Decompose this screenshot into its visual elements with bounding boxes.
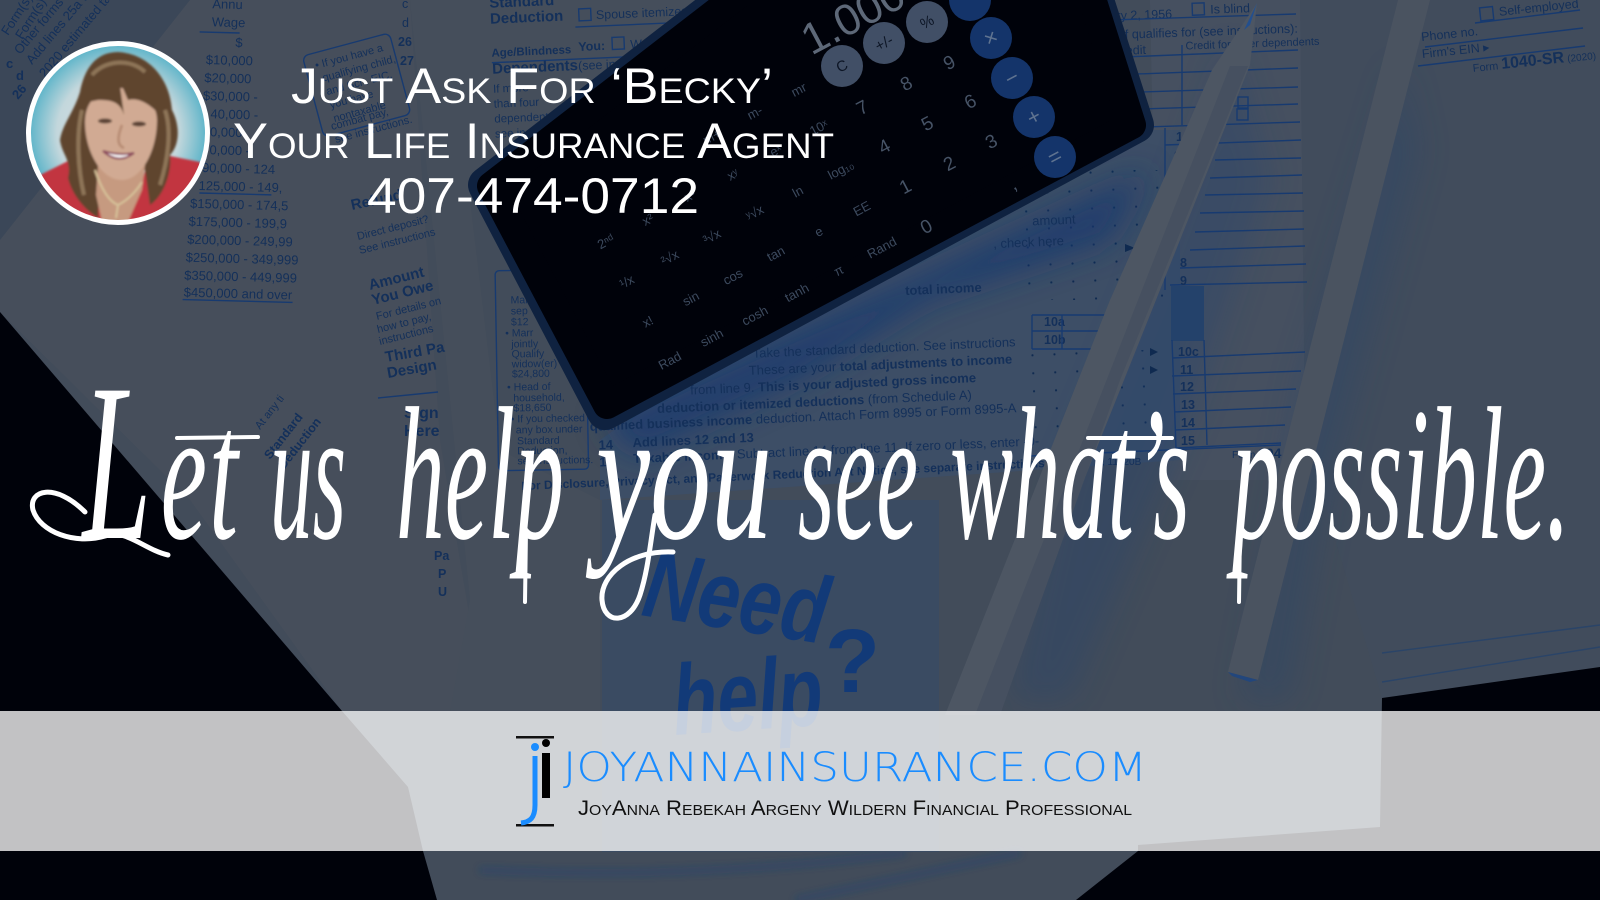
tax form: middle column: Amount: [367, 264, 426, 294]
tax form: income lines: from line 9. This is your adjusted gross income: [690, 370, 976, 397]
tax form: middle column: how to pay,: [376, 311, 433, 336]
calculator scientific keys: cosh: [739, 302, 770, 329]
tax form: right column of lines: 10a: [1044, 315, 1066, 329]
portrait: hair: [60, 52, 178, 218]
script headline: you: [586, 370, 772, 580]
tax form: middle column: and Sch. EIC,: [325, 69, 394, 98]
calculator scientific keys: cos: [720, 265, 746, 288]
tax form: standard deduction box: Deduction,: [517, 445, 568, 457]
calculator scientific keys: ¹/x: [617, 271, 637, 292]
calculator buttons: %: [917, 12, 937, 33]
tax form: income table: $150,000 - 174,5: [190, 196, 289, 213]
tax form: income lines: amount: [1032, 212, 1076, 228]
calculator phone: [486, 0, 1136, 412]
calculator scientific keys: eˣ: [767, 141, 785, 160]
tax form: middle column: you have: [329, 88, 375, 111]
script headline: t: [209, 369, 240, 580]
tax form: standard deduction box: • Marr: [505, 327, 534, 340]
tax form: standard deduction box: • Head of: [507, 381, 551, 394]
tax form: standard deduction box: sep: [511, 305, 528, 317]
tax form: middle column: qualifying child,: [321, 53, 397, 84]
tax form: main form upper part: Dependents: [492, 57, 578, 78]
script headline: what’s: [950, 370, 1190, 580]
tax form: top-right corner: Form 1040-SR (2020): [1472, 46, 1597, 76]
tax form: middle column: U: [438, 585, 447, 599]
tax form: middle column: See instructions: [358, 226, 437, 257]
tax form: standard deduction box: $24,800: [512, 368, 550, 380]
tax form: middle column: see instructions.: [334, 114, 414, 146]
agent tagline: JoyAnna Rebekah Argeny Wildern Financial Professional: [578, 797, 1132, 820]
tax form: income lines: , check here: [993, 233, 1064, 251]
tax form: middle column: Deduction: [275, 415, 324, 472]
tax form: middle column: Here: [404, 423, 440, 440]
calculator digit keys: 3: [982, 131, 1001, 154]
tax form: right column of lines: Credit for other dependents: [1185, 36, 1320, 53]
script headline: e: [161, 369, 207, 580]
phone number: 407-474-0712: [367, 168, 699, 224]
tax form: income table: $450,000 and over: [184, 285, 293, 302]
tax form: upper left rotated text: d: [16, 68, 24, 83]
tax form: main form upper part: Were born bef: [630, 34, 710, 52]
calculator buttons: +: [1022, 103, 1045, 131]
tax form: income table: 0,000 -: [209, 142, 250, 158]
script headline: us: [270, 370, 346, 580]
tax form: standard deduction box: see instructions.: [517, 454, 593, 467]
tax form: right column of lines: 13: [1181, 398, 1195, 412]
calculator scientific keys: log₁₀: [825, 157, 856, 183]
tax form: main form upper part: than four: [493, 97, 540, 111]
script headline: L: [80, 338, 151, 588]
calculator digit keys: 2: [940, 153, 959, 176]
tax form: income table: $250,000 - 349,999: [186, 250, 299, 268]
script headline: help: [396, 370, 564, 580]
calculator digit keys: 6: [961, 91, 980, 114]
tax form: right column of lines: 14: [1181, 416, 1195, 430]
heading line 1: Just Ask For ‘Becky’: [291, 58, 773, 114]
tax form: right column of lines: 11: [1180, 363, 1193, 377]
calculator digit keys: 5: [918, 113, 937, 136]
calculator buttons: =: [1043, 143, 1066, 171]
tax form: middle column: Refund: [349, 187, 403, 214]
sticky note: need help: [641, 554, 913, 852]
tax form: main form upper part: Spouse itemizes on a separate: [596, 1, 768, 22]
tax form: income table: $10,000: [206, 52, 253, 68]
calculator buttons: −: [1000, 64, 1023, 92]
tax form: right column of lines: 2: [1174, 149, 1181, 163]
tax form: standard deduction box: Married filing: [511, 293, 571, 306]
tax form: middle column: Pa: [434, 549, 450, 563]
tax form: income table: $30,000 -: [203, 88, 258, 104]
tax form: upper left rotated text: 26: [9, 81, 30, 102]
tax form: main form upper part: First n: [606, 77, 637, 91]
tax form: income lines: qualified business income deduction. Attach Form 8995 or Form 8995-A: [589, 400, 1017, 434]
tax form: right column of lines: 1: [1176, 130, 1183, 144]
phone glow shadow: [600, 170, 1150, 455]
calculator buttons: [821, 0, 1076, 178]
tax form: right column of lines: 12: [1180, 380, 1194, 394]
tax form: income table: $: [235, 35, 244, 50]
calculator scientific keys: mr: [789, 79, 810, 100]
tax form: middle column: Direct deposit?: [356, 214, 430, 243]
tax form: middle column: Sign: [404, 405, 439, 422]
sticky note: need help: help: [669, 635, 826, 757]
tax form: standard deduction box: [495, 269, 593, 471]
tax form: income lines: [510, 212, 1087, 493]
agent heading: [233, 58, 834, 224]
tax form: standard deduction box: Qualify: [511, 348, 545, 360]
tax form: standard deduction box: jointly: [510, 338, 539, 351]
tax form: income lines: 14: [598, 437, 614, 453]
calculator digit keys: 4: [875, 135, 895, 159]
black desk lower right: [1076, 667, 1600, 900]
calculator digit keys: 1: [896, 176, 915, 199]
tax form: middle column: Third Pa: [384, 339, 446, 366]
tax form: income lines: Take the standard deduction. See instructions: [752, 334, 1016, 361]
tax form: income table: 90,000 - 124: [202, 160, 275, 177]
sticky note: need help: Need: [637, 531, 838, 665]
heading line 2: Your Life Insurance Agent: [233, 113, 834, 169]
tax form: main form upper part: If more: [493, 82, 529, 96]
tax form: middle column: [253, 0, 450, 599]
tax form: right column of lines: 9: [1180, 274, 1187, 288]
portrait: jacket: [41, 154, 200, 220]
tax form: income table: $200,000 - 249,99: [187, 232, 293, 249]
tax form: main form upper part: [489, 0, 773, 141]
tax form: main form upper part: Deduction: [490, 8, 564, 28]
calculator scientific keys: EE: [851, 198, 873, 219]
tax form: middle column: 27: [400, 54, 414, 68]
tax form: main form upper part: dependents,: [494, 111, 558, 126]
tax form: right column of lines: x credit: [1105, 43, 1147, 58]
tax form: standard deduction box: widow(er): [511, 358, 557, 371]
tax form: right column of lines: 8: [1180, 256, 1187, 270]
calculator scientific keys: Rand: [865, 234, 899, 261]
calculator scientific keys: Rad: [656, 348, 684, 373]
tax form: main form upper part: Age/Blindness: [491, 44, 572, 60]
tax form: main form upper part: You:: [578, 39, 605, 54]
calculator scientific keys: 10ˣ: [807, 116, 831, 139]
tax form: income lines: 15: [599, 454, 614, 470]
tax form: middle column: P: [438, 567, 446, 581]
tax form: main form upper part: (see instructions): [578, 55, 674, 73]
calculator scientific keys: ³√x: [700, 225, 724, 247]
calculator digit keys: 8: [897, 73, 916, 96]
tax form: upper left rotated text: [0, 0, 134, 102]
tax form: right column of lines: 10b: [1044, 333, 1066, 347]
tax form: income lines: These are your total adjustments to income: [748, 351, 1013, 378]
calculator scientific keys: x!: [640, 313, 656, 331]
tax form: middle column: Design: [386, 357, 438, 382]
agent portrait: [28, 44, 215, 240]
tax form: middle column: For details on: [375, 295, 442, 323]
calculator digit keys: ,: [1006, 174, 1021, 195]
portrait: neck and chest: [96, 165, 145, 222]
calculator scientific keys: sinh: [698, 325, 726, 350]
tax form: main form upper part: see instr: [495, 127, 539, 141]
pencil 1: [945, 3, 1257, 715]
calculator scientific keys: tan: [764, 243, 787, 264]
calculator scientific keys: ²√x: [658, 246, 682, 268]
tax form: middle column: d: [402, 16, 409, 30]
calculator digit keys: 0: [917, 216, 936, 239]
tax form: income table: $350,000 - 449,999: [184, 268, 297, 286]
tax form: income lines: Taxable income. Subtract line 14 from line 11. If zero or less, enter -0-: [633, 433, 1039, 466]
tax form: right column of lines: January 2, 1956: [1082, 7, 1172, 24]
calculator scientific keys: ln: [790, 183, 806, 201]
tax form: middle column: nontaxable: [332, 99, 387, 125]
calculator digit keys: 7: [853, 97, 872, 120]
script headline: [32, 338, 1570, 618]
tax form: standard deduction box: any box under: [516, 423, 583, 436]
tax form: income table: 0,000: [210, 124, 243, 140]
tax form: income lines: For Disclosure, Privacy Act, and Paperwork Reduction Act Notice, see separate instructions.: [521, 456, 1048, 493]
tax form: income lines: total income: [905, 280, 982, 298]
calculator digit keys: 9: [940, 52, 959, 75]
tax form: main form upper part: (1): [588, 79, 602, 92]
tax form: standard deduction box: • If you checked: [511, 412, 585, 426]
calculator scientific keys: x³: [681, 186, 699, 205]
blue streaks under band: [480, 853, 1020, 900]
tax form: right column of lines: Is blind: [1210, 1, 1250, 17]
website address: JOYANNAINSURANCE.COM: [563, 745, 1147, 791]
tax form: right column of lines: [1030, 0, 1320, 468]
tax form: middle column: You Owe: [370, 277, 435, 309]
tax form: income table: [183, 0, 305, 303]
tax form: standard deduction box: household,: [513, 392, 565, 404]
tax form: upper left rotated text: c: [6, 56, 13, 71]
tax form: standard deduction box: Standard: [517, 435, 560, 447]
tax form: middle column: • If you have a: [314, 42, 385, 72]
calculator scientific keys: π: [831, 262, 846, 279]
tax form: middle column: instructions: [378, 323, 435, 348]
tax form: right column of lines: Form 104: [1232, 445, 1282, 461]
sticky note: need help: ?: [825, 612, 880, 712]
tax form: standard deduction box: $18,650: [513, 402, 552, 414]
tax form: middle column: combat pay,: [330, 106, 390, 133]
calculator scientific keys: e: [812, 223, 825, 240]
tax form: top-right corner: [1418, 0, 1597, 81]
tax form: middle column: Standard: [261, 411, 306, 462]
tax form: right column of lines: if qualifies for (see instructions):: [1122, 22, 1298, 42]
tax form: income table: $20,000: [204, 70, 252, 86]
tax form: middle column: 26: [398, 35, 412, 49]
website band: [0, 711, 1600, 851]
tax form: income table: 125,000 - 149,: [198, 178, 283, 195]
tax form: top-right corner: Firm's EIN ▸: [1421, 40, 1491, 61]
portrait: face: [85, 88, 157, 180]
calculator scientific keys: x²: [639, 210, 657, 229]
tax form: income lines: deduction or itemized deductions (from Schedule A): [657, 387, 972, 416]
tax form: income table: 40,000 -: [210, 106, 258, 123]
lower paper lines: [1382, 625, 1600, 682]
calculator scientific keys: tanh: [782, 280, 811, 305]
calculator scientific keys: ʸ√x: [742, 202, 767, 224]
tax form: income table: Wage: [212, 14, 246, 30]
tax form: income table: $175,000 - 199,9: [188, 214, 287, 231]
tax form: top-right corner: Phone no.: [1420, 24, 1479, 44]
script headline: see: [798, 370, 918, 580]
tax form: middle column: At any ti: [253, 393, 287, 432]
calculator scientific keys: xʸ: [725, 165, 742, 184]
calculator scientific keys: m-: [745, 102, 765, 123]
tax form: right column of lines: 15: [1181, 434, 1195, 448]
calculator buttons: C: [833, 56, 851, 76]
tax form: right column of lines: 10c: [1178, 345, 1199, 359]
black desk diagonal: [0, 312, 437, 900]
calculator scientific keys: m+: [700, 126, 723, 148]
ji logo: [516, 736, 554, 826]
tax form: standard deduction box: $12: [511, 316, 529, 328]
calculator scientific keys: [595, 79, 899, 373]
calculator buttons: +/-: [872, 32, 896, 55]
calculator buttons: ×: [979, 24, 1002, 52]
tax form: right column of lines: , 11320B: [1102, 457, 1142, 468]
tax form: income lines: Add lines 12 and 13: [632, 430, 754, 450]
portrait: necklace: [95, 170, 142, 218]
pencil 2: [1228, 0, 1430, 682]
calculator scientific keys: sin: [680, 288, 702, 309]
calculator scientific keys: 2ⁿᵈ: [595, 231, 617, 252]
calculator digit keys: [853, 52, 1021, 239]
